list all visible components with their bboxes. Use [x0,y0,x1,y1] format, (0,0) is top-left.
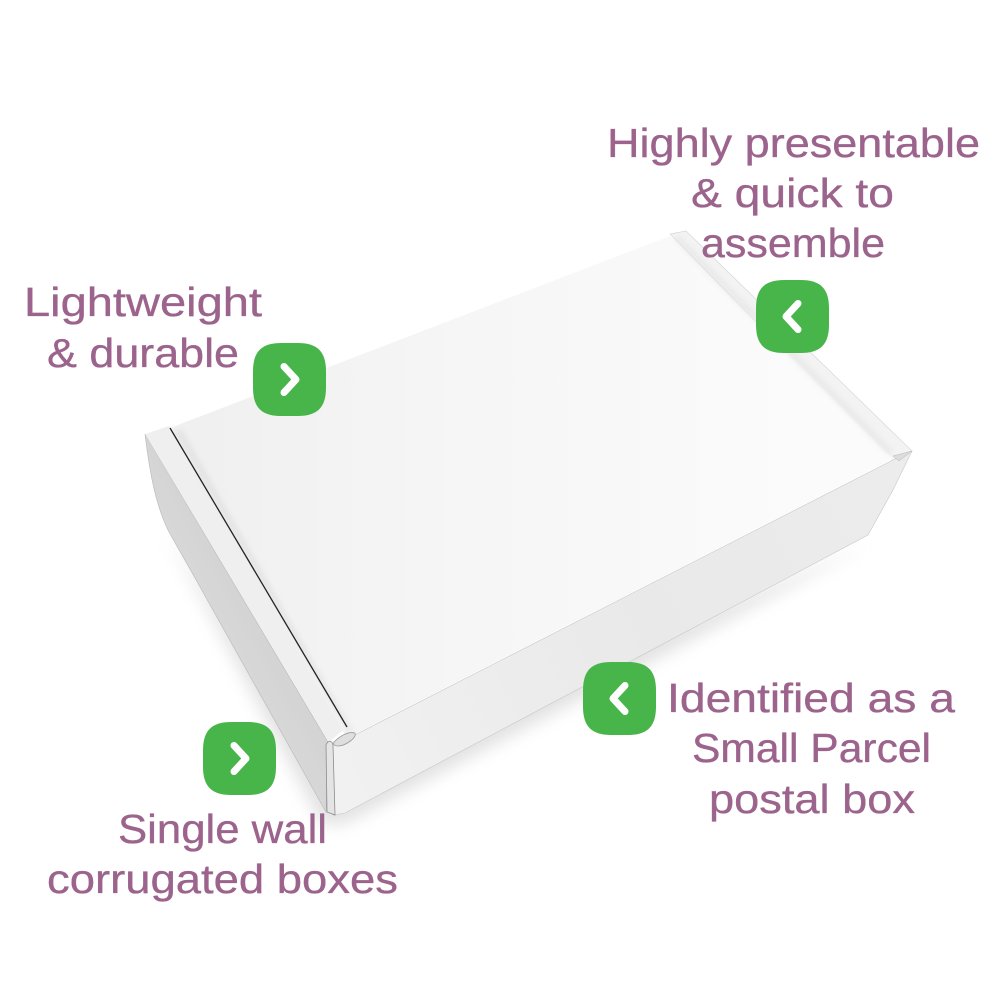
icon: left chevron button [756,280,829,353]
label text [667,675,955,822]
lid slot shadow line [170,428,347,727]
lid fold shading along right edge [672,236,893,456]
label text: postal box [709,776,916,822]
right corner tab [893,451,912,461]
icon: left chevron button [583,662,656,735]
lid top [170,236,893,738]
left flap [145,426,347,742]
front corner fold [326,741,335,815]
icon: right chevron button [203,722,276,795]
front wall [327,451,912,815]
label text: Highly presentable [607,120,980,166]
box shadow [165,530,868,825]
label text [24,279,263,376]
lid fold shading along left edge [174,429,352,734]
label text: Lightweight [24,279,263,325]
callout: small parcel [583,662,955,822]
box product photo [145,231,912,825]
label text: Identified as a [667,675,955,721]
label text: Single wall [118,806,327,852]
label text: Small Parcel [692,725,931,771]
right flap [670,231,912,462]
left side wall [145,434,328,812]
label text [47,806,398,902]
label text [607,120,980,266]
label text: corrugated boxes [47,856,398,902]
callout: single wall [47,722,398,902]
front corner tab [334,733,355,746]
label text: & quick to [691,170,894,216]
label text: assemble [701,220,885,266]
icon: right chevron button [253,343,326,416]
label text: & durable [47,330,239,376]
callout: lightweight [24,279,326,416]
callout: highly presentable [607,120,980,353]
